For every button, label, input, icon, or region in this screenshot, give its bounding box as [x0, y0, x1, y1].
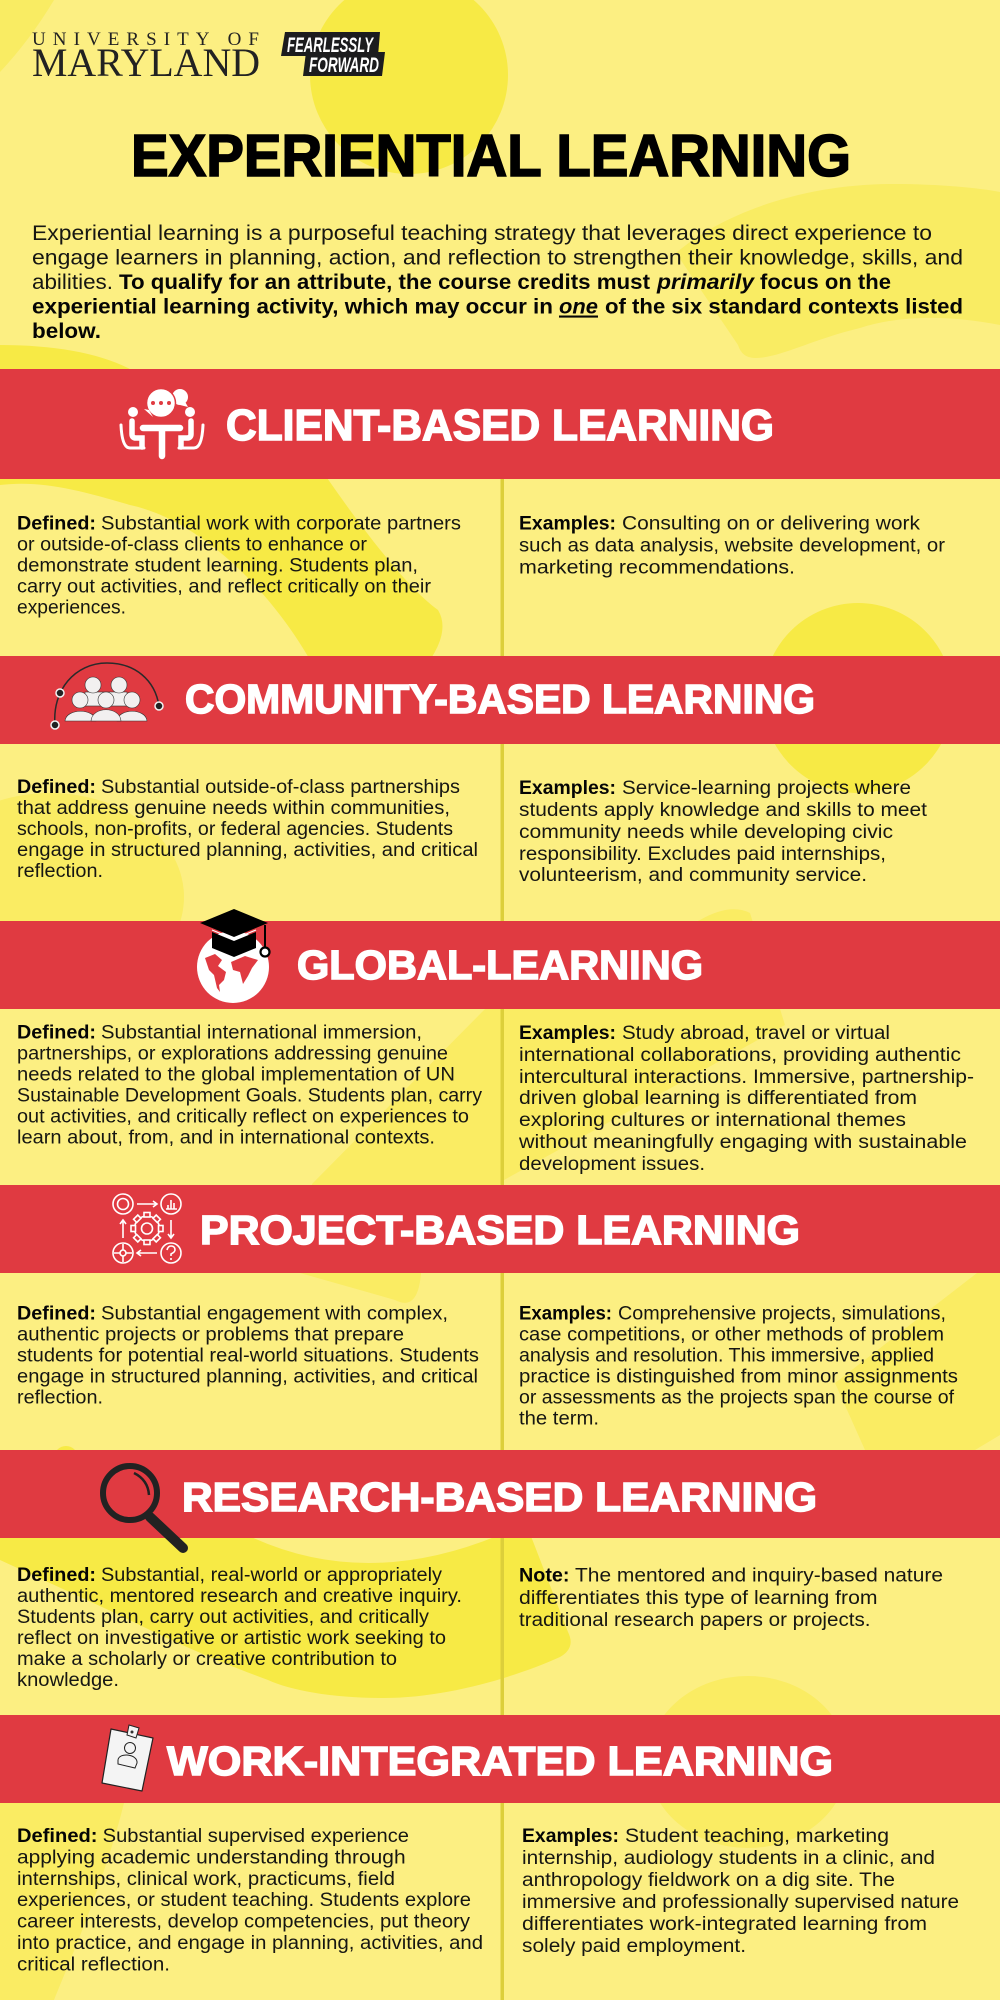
defined text: into practice, and engage in planning, activities, and — [17, 1933, 483, 1954]
defined text: Substantial, real-world or appropriately — [101, 1565, 443, 1586]
panel: research-based learning — [0, 1450, 1000, 1691]
defined text: knowledge. — [17, 1670, 119, 1691]
icon: project cycle with gear — [113, 1194, 181, 1263]
defined text: Defined: — [17, 777, 96, 798]
defined text: Substantial supervised experience — [103, 1826, 409, 1847]
examples text: Comprehensive projects, simulations, — [618, 1304, 946, 1324]
defined text — [17, 1565, 462, 1691]
examples text: Examples: — [519, 514, 616, 534]
icon: ID badge — [102, 1725, 153, 1791]
examples text: Examples: — [519, 778, 616, 799]
defined text: authentic projects or problems that prepare — [17, 1324, 404, 1346]
examples text: solely paid employment. — [522, 1936, 746, 1957]
defined text: Substantial international immersion, — [101, 1022, 422, 1044]
intro text — [32, 222, 963, 343]
defined text: make a scholarly or creative contribution to — [17, 1649, 397, 1670]
defined text — [17, 1022, 483, 1148]
examples text: responsibility. Excludes paid internships, — [519, 844, 886, 865]
panel: global learning — [0, 909, 1000, 1175]
defined text: schools, non-profits, or federal agencies. Students — [17, 819, 453, 840]
intro text: Experiential learning is a purposeful teaching strategy that leverages direct experience to — [32, 222, 932, 245]
defined text: learn about, from, and in international contexts. — [17, 1128, 435, 1148]
defined text: Defined: — [17, 1826, 98, 1847]
examples text: Examples: — [519, 1304, 612, 1324]
note text: differentiates this type of learning from — [519, 1588, 878, 1609]
examples text: without meaningfully engaging with sustainable — [518, 1132, 967, 1153]
logo: University of Maryland: UNIVERSITY OF — [32, 29, 259, 50]
heading: WORK-INTEGRATED LEARNING — [167, 1738, 833, 1784]
defined text: Defined: — [17, 1304, 96, 1324]
note text: The mentored and inquiry-based nature — [575, 1566, 943, 1586]
defined text: Substantial work with corporate partners — [101, 514, 461, 534]
banner — [0, 1450, 1000, 1538]
defined text: Substantial outside-of-class partnerships — [101, 777, 460, 798]
examples text: Student teaching, marketing — [625, 1826, 889, 1847]
intro text: experiential learning activity, which may occur in — [32, 296, 553, 318]
examples text: Study abroad, travel or virtual — [622, 1023, 890, 1044]
banner — [0, 369, 1000, 479]
banner — [0, 921, 1000, 1009]
note text — [519, 1566, 943, 1631]
examples text: Service-learning projects where — [622, 778, 911, 799]
examples text: Examples: — [522, 1826, 619, 1847]
examples text: the term. — [519, 1408, 599, 1430]
defined text: needs related to the global implementation of UN — [17, 1064, 455, 1086]
defined text — [17, 1304, 479, 1408]
examples text — [519, 514, 946, 578]
examples text: or assessments as the projects span the course of — [519, 1388, 955, 1408]
defined text: applying academic understanding through — [17, 1847, 406, 1868]
examples text: Consulting on or delivering work — [622, 514, 921, 534]
note text: Note: — [519, 1566, 570, 1586]
icon: community group — [51, 663, 163, 729]
panel: client-based learning — [0, 369, 1000, 618]
icon: client meeting — [121, 388, 203, 456]
title: EXPERIENTIAL LEARNING — [131, 123, 851, 189]
intro text: To qualify for an attribute, the course credits must — [119, 271, 650, 294]
icon: globe and graduation cap — [197, 909, 270, 1003]
defined text: Defined: — [17, 1565, 96, 1586]
defined text: Defined: — [17, 1022, 96, 1044]
examples text: marketing recommendations. — [519, 558, 795, 578]
examples text: international collaborations, providing authentic — [519, 1045, 961, 1066]
defined text — [17, 1826, 483, 1975]
defined text: or outside-of-class clients to enhance or — [17, 534, 368, 556]
intro text: below. — [32, 320, 101, 343]
defined text: engage in structured planning, activities, and critical — [17, 840, 478, 861]
panel: work-integrated learning — [0, 1715, 1000, 1975]
examples text: practice is distinguished from minor assignments — [519, 1366, 958, 1388]
examples text: intercultural interactions. Immersive, partnership- — [519, 1067, 974, 1088]
examples text: development issues. — [519, 1154, 705, 1175]
examples text: volunteerism, and community service. — [519, 865, 867, 886]
defined text: Defined: — [17, 514, 96, 534]
defined text: Substantial engagement with complex, — [101, 1304, 448, 1324]
examples text: differentiates work-integrated learning from — [522, 1914, 927, 1935]
intro text: of the six standard contexts listed — [605, 296, 963, 318]
logo: Fearlessly Forward: FEARLESSLY — [287, 34, 374, 57]
defined text: reflection. — [17, 1388, 103, 1408]
examples text: community needs while developing civic — [519, 822, 893, 843]
banner — [0, 1185, 1000, 1273]
examples text — [519, 1304, 958, 1430]
defined text: reflect on investigative or artistic work seeking to — [17, 1628, 446, 1649]
heading: PROJECT-BASED LEARNING — [200, 1207, 800, 1253]
examples text: immersive and professionally supervised nature — [522, 1892, 959, 1913]
intro text: engage learners in planning, action, and reflection to strengthen their knowledge, skills, and — [32, 246, 963, 270]
examples text: students apply knowledge and skills to meet — [519, 800, 928, 821]
examples text: analysis and resolution. This immersive, applied — [519, 1346, 934, 1366]
examples text: driven global learning is differentiated from — [519, 1088, 917, 1109]
heading: GLOBAL-LEARNING — [297, 942, 703, 988]
defined text: out activities, and critically reflect on experiences to — [17, 1106, 469, 1128]
examples text: such as data analysis, website development, or — [519, 536, 946, 556]
banner — [0, 656, 1000, 744]
examples text: exploring cultures or international themes — [519, 1110, 906, 1131]
heading: RESEARCH-BASED LEARNING — [182, 1474, 817, 1520]
defined text: that address genuine needs within communities, — [17, 798, 450, 819]
logo: Fearlessly Forward — [281, 32, 385, 77]
examples text: internship, audiology students in a clinic, and — [522, 1848, 935, 1869]
panel: project-based learning — [0, 1185, 1000, 1430]
defined text — [17, 514, 461, 618]
examples text — [519, 778, 928, 886]
banner — [0, 1715, 1000, 1803]
defined text: career interests, develop competencies, put theory — [17, 1912, 471, 1933]
examples text: anthropology fieldwork on a dig site. The — [522, 1870, 895, 1891]
defined text: Sustainable Development Goals. Students plan, carry — [17, 1086, 483, 1106]
defined text: Students plan, carry out activities, and critically — [17, 1607, 430, 1628]
icon: magnifying glass — [103, 1466, 183, 1548]
intro text: one — [559, 296, 598, 318]
examples text — [522, 1826, 959, 1957]
examples text — [518, 1023, 974, 1175]
examples text: Examples: — [519, 1023, 616, 1044]
note text: traditional research papers or projects. — [519, 1610, 870, 1631]
examples text: case competitions, or other methods of problem — [519, 1324, 944, 1346]
defined text: carry out activities, and reflect critically on their — [17, 576, 432, 598]
defined text: engage in structured planning, activities, and critical — [17, 1366, 478, 1388]
defined text — [17, 777, 478, 882]
intro text: abilities. — [32, 271, 113, 294]
intro text: focus on the — [760, 271, 891, 294]
defined text: critical reflection. — [17, 1954, 170, 1975]
logo: Fearlessly Forward: FORWARD — [309, 54, 379, 77]
defined text: authentic, mentored research and creative inquiry. — [17, 1586, 462, 1607]
defined text: students for potential real-world situations. Students — [17, 1346, 479, 1366]
defined text: internships, clinical work, practicums, field — [17, 1869, 395, 1890]
heading: CLIENT-BASED LEARNING — [226, 401, 774, 450]
defined text: demonstrate student learning. Students plan, — [17, 556, 418, 576]
defined text: reflection. — [17, 861, 103, 882]
heading: COMMUNITY-BASED LEARNING — [185, 676, 815, 722]
defined text: experiences, or student teaching. Students explore — [17, 1890, 471, 1911]
defined text: partnerships, or explorations addressing genuine — [17, 1044, 448, 1064]
logo: University of Maryland: MARYLAND — [32, 40, 260, 85]
defined text: experiences. — [17, 598, 126, 618]
intro text: primarily — [656, 271, 755, 294]
panel: community-based learning — [0, 656, 1000, 886]
